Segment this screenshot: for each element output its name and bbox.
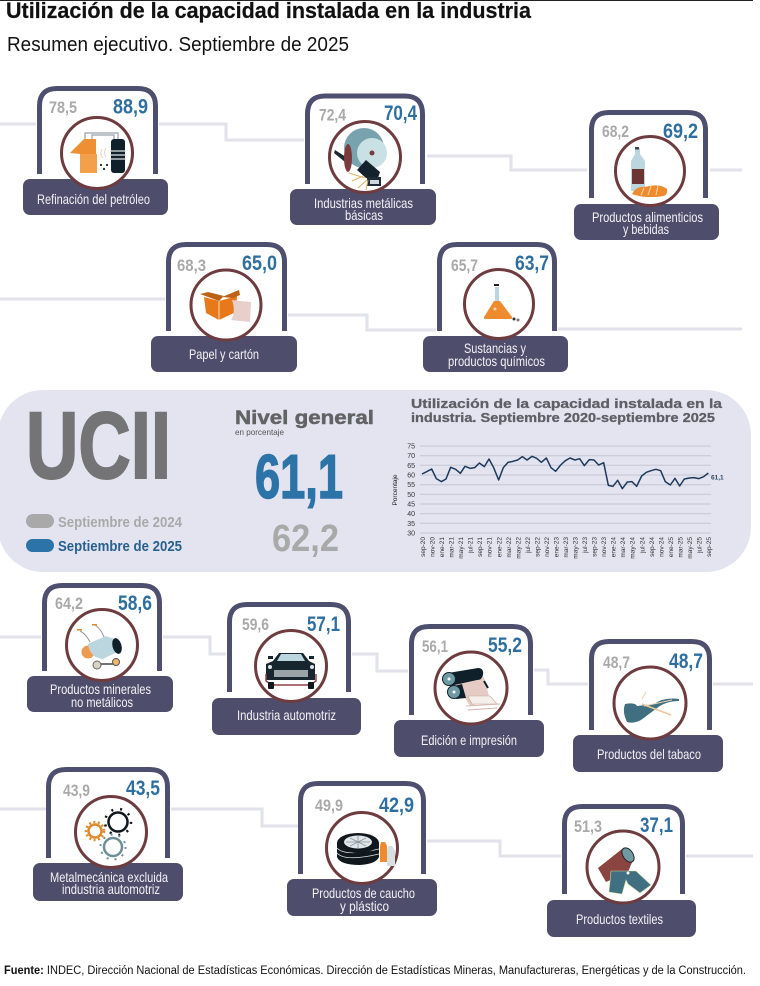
label: Productos de caucho [312, 885, 415, 901]
label: Papel y cartón [189, 346, 259, 362]
card: Industrias metálicas básicas: 70,4 [384, 102, 417, 125]
line chart: may-22 [515, 537, 522, 559]
line chart: may-21 [458, 537, 465, 559]
line chart: mar-23 [563, 537, 570, 558]
card: Productos minerales no metálicos: 64,2 [55, 594, 83, 613]
card: Metalmecánica excluida industria automotriz: 43,5 [126, 777, 160, 800]
line chart: nov-24 [658, 537, 665, 557]
line chart [392, 444, 724, 559]
label: Industria automotriz [237, 707, 336, 723]
card: Edición e impresión [394, 626, 544, 757]
line chart: ene-25 [668, 537, 675, 557]
card: Industrias metálicas básicas: básicas [345, 207, 383, 223]
card: Metalmecánica excluida industria automotriz: industria automotriz [62, 881, 160, 897]
chart title [411, 396, 723, 425]
line chart: nov-23 [601, 537, 608, 557]
heading: UCII: UCII [26, 393, 171, 499]
label: Industrias metálicas [314, 195, 413, 211]
card: Productos minerales no metálicos: no metálicos [71, 694, 133, 710]
line chart: ene-24 [611, 537, 618, 557]
label: Edición e impresión [421, 732, 517, 748]
line chart: jul-25 [696, 537, 704, 554]
legend: Septiembre de 2024 [58, 514, 183, 531]
icon: pipa [624, 692, 679, 723]
label: Productos textiles [576, 911, 663, 927]
card: Productos del tabaco: 48,7 [603, 653, 630, 672]
card: Productos textiles: 37,1 [640, 814, 673, 837]
source note: Fuente: INDEC, Dirección Nacional de Estadísticas Económicas. Dirección de Estadísticas Mineras, Manufactureras, Energéticas y de la Construcción. [4, 965, 746, 977]
icon: neumáticos y botellas [337, 833, 395, 866]
line chart: jul-23 [582, 537, 589, 554]
card: Sustancias y productos químicos: 65,7 [451, 256, 478, 275]
card: Industrias metálicas básicas [290, 96, 436, 225]
line chart: may-24 [630, 537, 637, 559]
card: Sustancias y productos químicos [423, 244, 568, 372]
card: Productos textiles [547, 806, 696, 937]
line chart: jul-21 [468, 537, 475, 554]
line chart: nov-22 [544, 537, 551, 557]
line chart: nov-21 [487, 537, 494, 557]
line chart: mar-21 [449, 537, 456, 558]
card: Productos alimenticios y bebidas [574, 112, 719, 240]
line chart: may-23 [572, 537, 580, 559]
icon: caja y papel [200, 290, 251, 322]
legend: Septiembre de 2025 [58, 538, 182, 555]
card: Refinación del petróleo [23, 88, 168, 215]
card: Productos textiles: 51,3 [574, 817, 602, 836]
line chart: 75 [407, 444, 415, 450]
chart title: Utilización de la capacidad instalada en la [411, 396, 723, 411]
line chart: 35 [407, 521, 415, 528]
card: Refinación del petróleo: 78,5 [49, 98, 77, 117]
label: Sustancias y [464, 340, 526, 356]
line chart: mar-24 [620, 537, 627, 558]
card: Edición e impresión: 55,2 [488, 634, 522, 657]
card: Productos alimenticios y bebidas: 69,2 [663, 120, 698, 143]
line chart: 45 [407, 502, 415, 508]
line chart: sep-24 [649, 537, 656, 557]
card: Productos de caucho y plástico: 49,9 [315, 796, 343, 815]
connector lines [0, 124, 753, 856]
icon: imprenta [442, 668, 500, 710]
value 2025: 61,1 [255, 443, 343, 512]
card: Sustancias y productos químicos: 63,7 [515, 252, 549, 275]
label: Refinación del petróleo [37, 191, 150, 207]
card: Papel y cartón: 65,0 [242, 252, 277, 275]
value 2024: 62,2 [272, 518, 339, 560]
card: Productos de caucho y plástico: 42,9 [379, 794, 414, 817]
line chart: sep-23 [592, 537, 599, 557]
line chart: jul-24 [639, 537, 646, 554]
line chart: nov-20 [430, 537, 436, 557]
line chart: mar-25 [677, 537, 684, 558]
line chart: may-25 [687, 537, 694, 559]
unit note: en porcentaje [235, 427, 284, 437]
card: Edición e impresión: 56,1 [422, 637, 448, 656]
icon: botella y pan [631, 147, 667, 197]
card: Productos de caucho y plástico [287, 784, 437, 916]
line chart: 40 [407, 511, 415, 518]
card: Productos de caucho y plástico: y plástico [340, 898, 389, 914]
card: Productos del tabaco [573, 642, 723, 772]
line chart: 61,1 [711, 474, 724, 482]
icon: refinería [70, 133, 126, 173]
card: Papel y cartón [151, 244, 297, 372]
card: Productos alimenticios y bebidas: 68,2 [602, 122, 629, 141]
card: Industria automotriz: 59,6 [242, 615, 269, 634]
card: Productos del tabaco: 48,7 [669, 650, 703, 673]
line chart: 70 [407, 453, 415, 460]
chart title: industria. Septiembre 2020-septiembre 2025 [411, 410, 715, 425]
card: Industria automotriz [212, 604, 361, 735]
line chart: 55 [407, 482, 415, 489]
line chart: sep-25 [706, 537, 713, 557]
label: Productos del tabaco [597, 746, 701, 762]
line chart: sep-20 [420, 537, 427, 557]
card: Papel y cartón: 68,3 [177, 256, 206, 275]
legend [26, 514, 183, 555]
icon: matraz [484, 284, 520, 322]
line chart: 65 [407, 463, 415, 470]
icon: hormigonera [77, 624, 123, 669]
line chart: Porcentaje [392, 474, 399, 506]
card: Productos alimenticios y bebidas: y bebidas [623, 221, 669, 237]
line chart: 50 [407, 492, 415, 499]
label: Metalmecánica excluida [50, 869, 168, 885]
line chart: ene-23 [554, 537, 560, 557]
line chart: sep-22 [534, 537, 541, 557]
card: Productos minerales no metálicos [27, 586, 173, 712]
label: Productos alimenticios [592, 209, 703, 225]
label: Productos minerales [50, 681, 151, 697]
line chart: sep-21 [477, 537, 484, 557]
icon: hilo y pantalones [598, 846, 651, 894]
line chart: 60 [407, 472, 415, 480]
subtitle: Resumen ejecutivo. Septiembre de 2025 [7, 34, 349, 56]
card: Sustancias y productos químicos: productos químicos [448, 353, 545, 369]
card: Metalmecánica excluida industria automotriz: 43,9 [63, 781, 90, 800]
line chart: 30 [407, 530, 415, 538]
icon: engranajes [86, 809, 131, 860]
heading: Nivel general: Nivel general [235, 408, 374, 429]
card: Metalmecánica excluida industria automotriz [33, 770, 183, 901]
card: Refinación del petróleo: 88,9 [113, 96, 148, 118]
line chart: ene-22 [496, 537, 503, 557]
icon: amoladora [334, 128, 387, 190]
panel: UCII [0, 390, 751, 572]
line chart: ene-21 [439, 537, 446, 557]
line chart: jul-22 [525, 537, 532, 554]
card: Industria automotriz: 57,1 [307, 613, 340, 636]
card: Industrias metálicas básicas: 72,4 [319, 106, 346, 124]
card: Productos minerales no metálicos: 58,6 [118, 592, 152, 615]
icon: auto [266, 653, 316, 689]
line chart: mar-22 [506, 537, 513, 558]
